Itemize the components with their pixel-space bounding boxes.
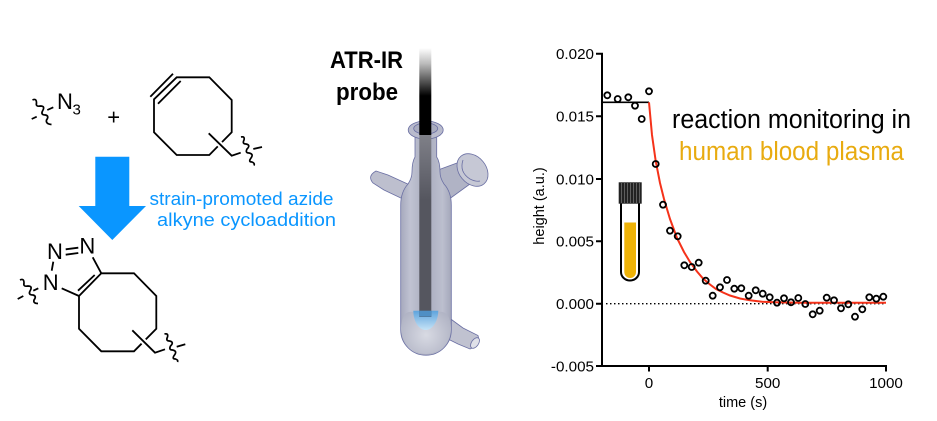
probe label: ATR-IR — [330, 47, 403, 74]
x axis tick labels: 0 — [645, 375, 653, 392]
reaction label: alkyne cycloaddition — [157, 210, 336, 230]
cyclooctyne reagent — [150, 74, 262, 166]
azide reagent — [32, 89, 81, 124]
left hose connector — [371, 171, 412, 200]
x axis tick labels — [645, 375, 903, 392]
azide reagent: 3 — [72, 102, 81, 118]
zero line — [606, 303, 886, 305]
data points — [604, 88, 886, 320]
chart — [532, 46, 903, 411]
azide reagent: N — [57, 89, 73, 114]
y axis tick labels: -0.005 — [551, 358, 594, 375]
probe label: probe — [336, 79, 398, 106]
probe label — [330, 47, 403, 106]
x axis tick labels: 500 — [755, 375, 780, 392]
liquid — [413, 311, 438, 330]
probe inside flask — [419, 135, 431, 317]
y axis tick labels: 0.020 — [556, 46, 594, 63]
right side neck — [438, 163, 470, 205]
headline: human blood plasma — [679, 138, 905, 166]
reaction label — [150, 189, 336, 230]
x axis title: time (s) — [719, 395, 767, 411]
bottom hose connector — [444, 317, 479, 349]
headline: reaction monitoring in — [672, 106, 911, 134]
y axis tick labels: 0.005 — [556, 234, 594, 251]
headline — [672, 106, 911, 166]
triazole product: N — [43, 270, 59, 295]
triazole product: N — [47, 239, 63, 264]
baseline fit — [602, 101, 649, 103]
neck joint — [408, 121, 443, 139]
triazole product: N — [79, 234, 95, 258]
icon: blood plasma test tube — [619, 182, 642, 280]
reaction flask with ATR-IR probe — [371, 46, 494, 355]
probe shaft — [419, 46, 431, 135]
y axis title: height (a.u.) — [532, 167, 548, 245]
y axis tick labels — [551, 46, 594, 375]
triazole product — [18, 234, 185, 362]
y axis tick labels: 0.015 — [556, 109, 594, 126]
y axis tick labels: 0.010 — [556, 171, 594, 188]
decay fit curve — [649, 102, 886, 303]
y axis tick labels: 0.000 — [556, 296, 594, 313]
axes — [596, 54, 886, 371]
reaction arrow — [79, 157, 146, 240]
flask body — [401, 135, 451, 355]
reaction label: strain-promoted azide — [150, 189, 334, 209]
x axis tick labels: 1000 — [869, 375, 903, 392]
plus sign: + — [107, 104, 120, 130]
